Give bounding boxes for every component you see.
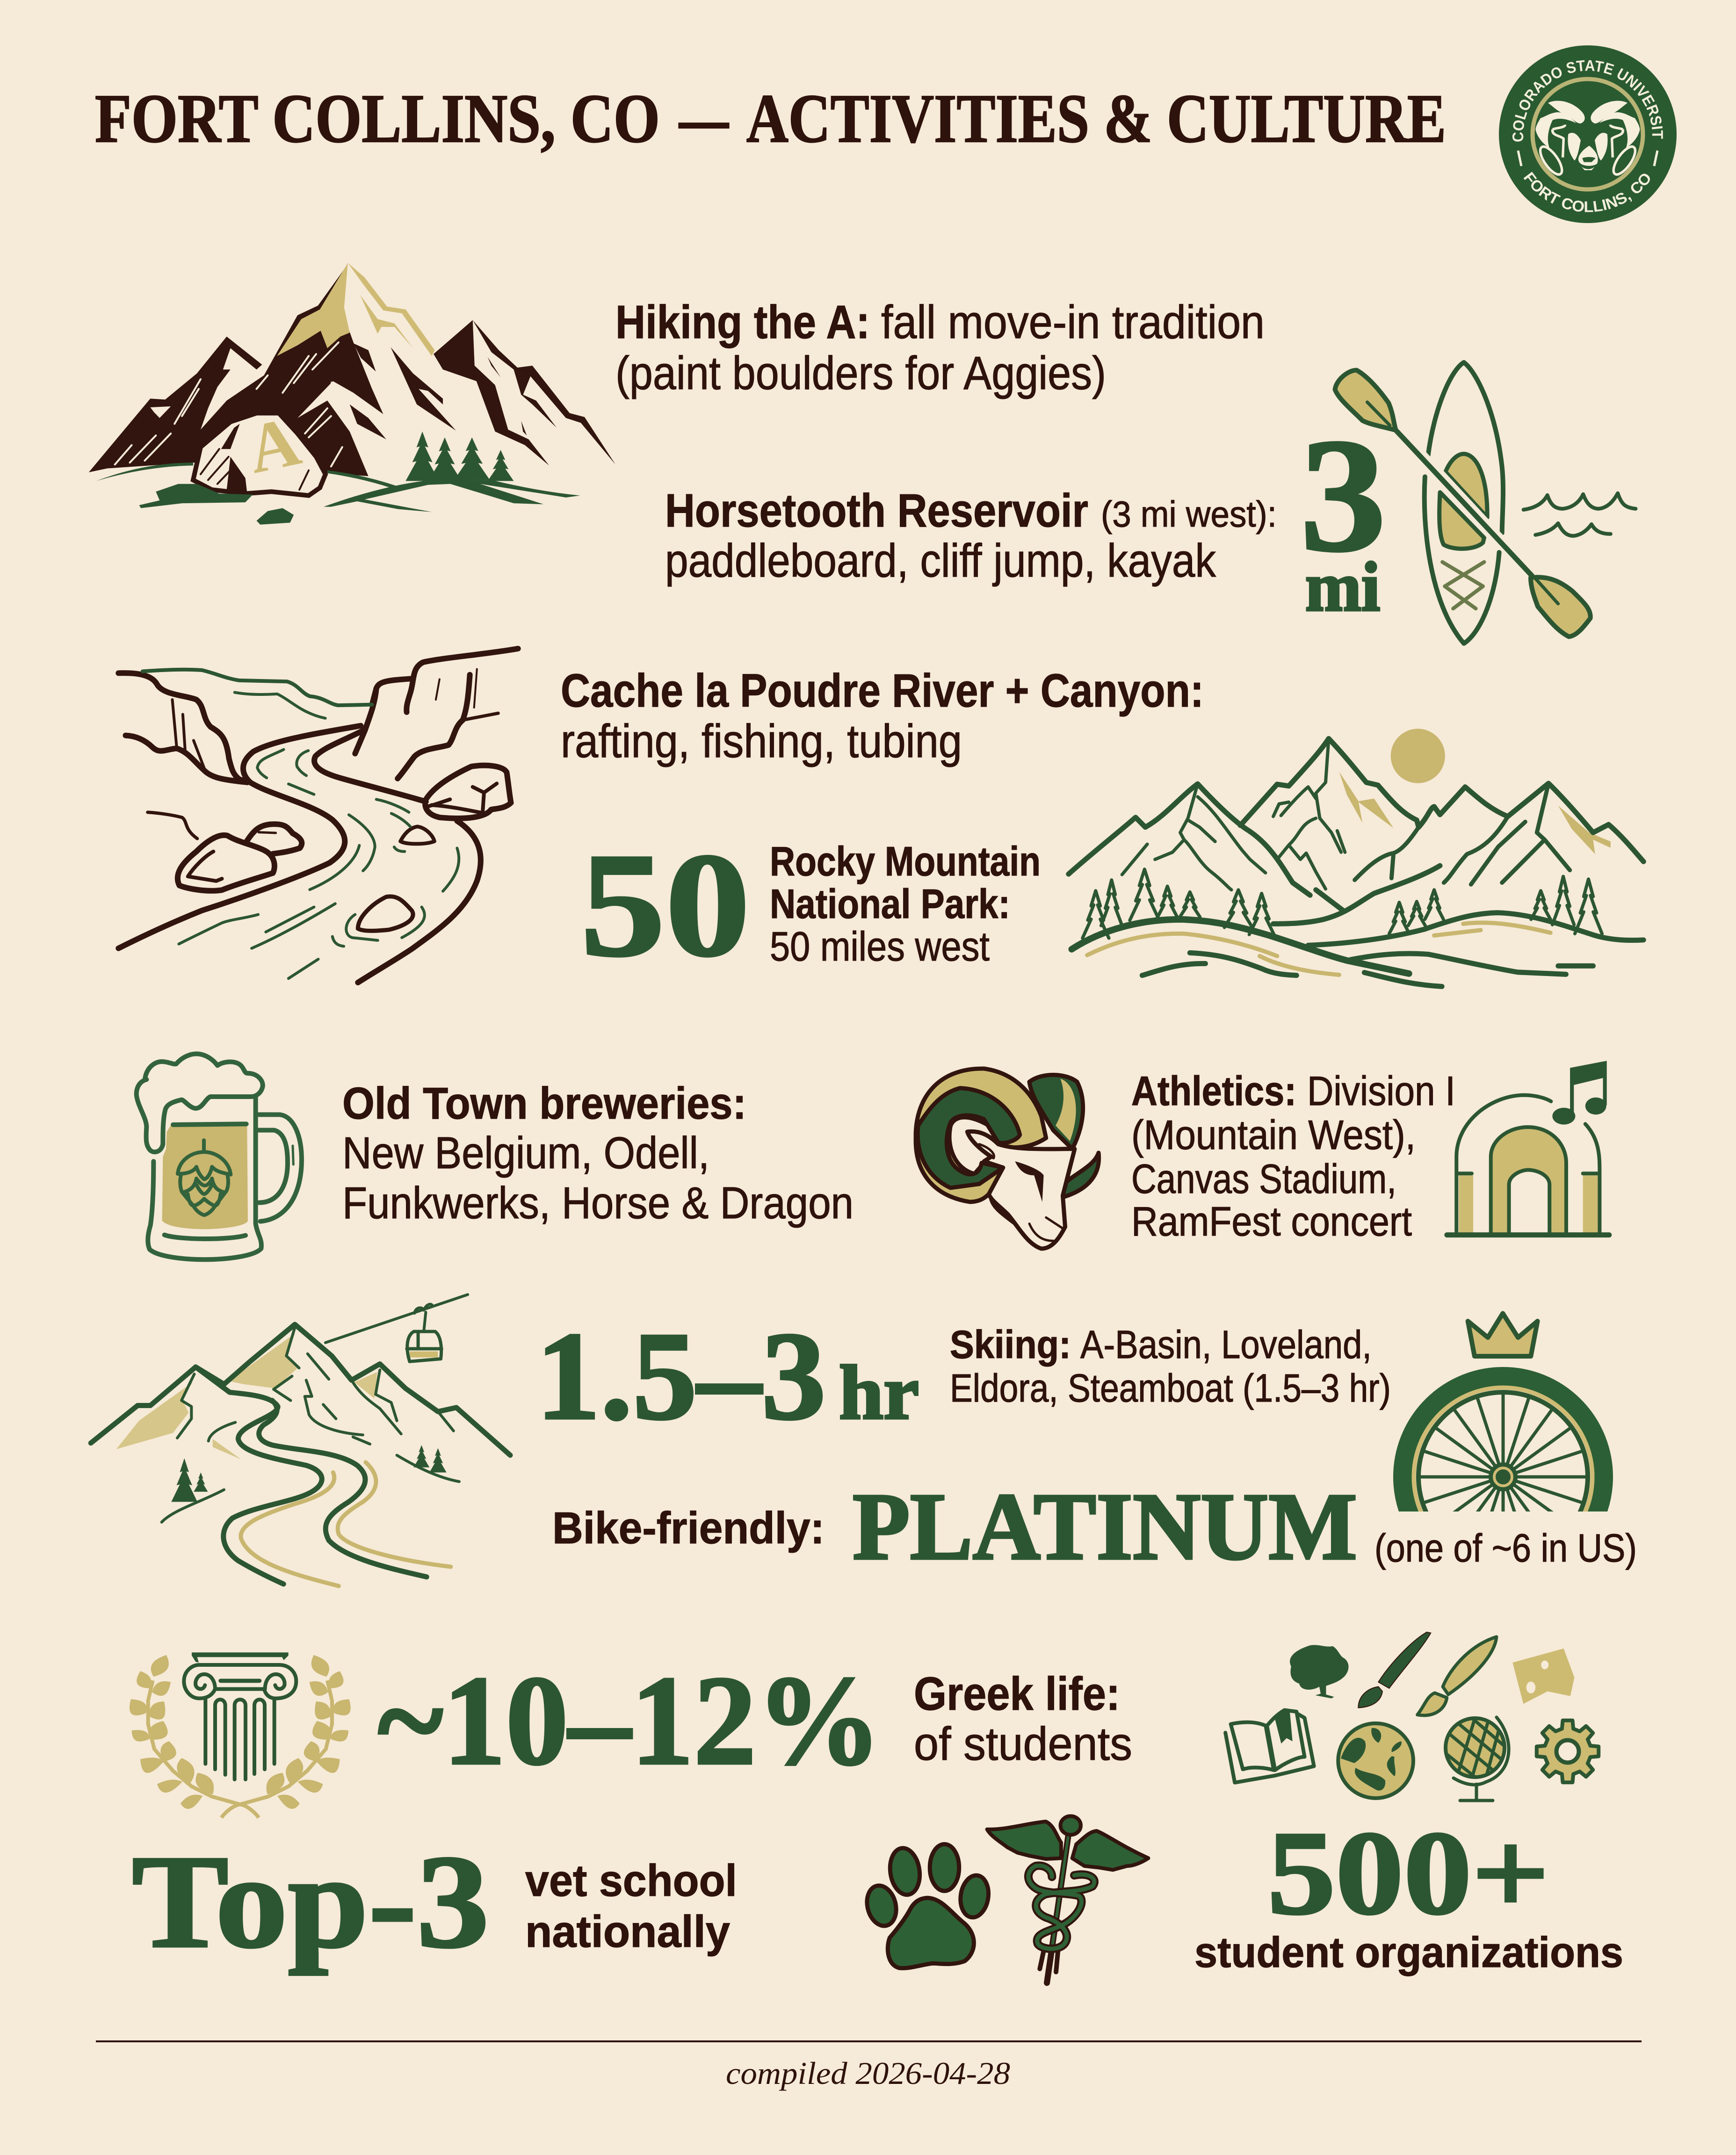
icon: Ionic column with laurel wreath	[130, 1652, 351, 1818]
text: Athletics	[1131, 1068, 1455, 1244]
icon: beer mug with hop	[137, 1054, 302, 1259]
icon: paintbrush dark	[1358, 1632, 1431, 1708]
text: Skiing: Skiing:	[950, 1323, 1071, 1367]
icon: paintbrush gold	[1418, 1637, 1497, 1715]
text: Skiing	[950, 1323, 1391, 1410]
boulder with letter A	[193, 413, 326, 496]
text: vet school nationally	[525, 1856, 737, 1957]
stat: Top-3: Top-3	[132, 1828, 489, 1975]
text: Hiking the A: fall move-in tradition	[881, 296, 1265, 348]
stat: 1.5–3 hr: hr	[839, 1350, 919, 1435]
title: ACTIVITIES & CULTURE	[746, 80, 1446, 157]
icon: hop cone	[178, 1140, 231, 1215]
text: Rocky Mountain National Park: 50 miles west	[770, 923, 990, 969]
text: Old Town breweries: Funkwerks, Horse & Dragon	[342, 1178, 854, 1228]
text: Old Town breweries: Old Town breweries:	[342, 1078, 746, 1128]
text: Athletics: (Mountain West),	[1131, 1112, 1416, 1158]
icon: tree	[1290, 1645, 1349, 1699]
stat: 3 mi: mi	[1305, 548, 1380, 626]
stat: 1.5–3 hr: 1.5–3	[536, 1306, 826, 1446]
text: Athletics: Division I	[1307, 1068, 1455, 1114]
text: Old Town breweries: New Belgium, Odell,	[342, 1128, 709, 1178]
icon: gondola lift	[326, 1294, 468, 1361]
text: Horsetooth Reservoir	[665, 485, 1277, 587]
icons: student organization activities	[1225, 1632, 1599, 1801]
stat: 50: 50	[580, 823, 750, 987]
text: Horsetooth Reservoir: (3 mi west):	[1101, 493, 1277, 535]
title: —	[679, 80, 729, 157]
text: Athletics: Canvas Stadium,	[1131, 1156, 1396, 1202]
text: Greek life: Greek life:	[914, 1668, 1120, 1720]
icon: open book	[1225, 1710, 1314, 1783]
text: Rocky Mountain National Park: National Park:	[770, 881, 1010, 927]
text: Cache la Poudre River: Cache la Poudre River + Canyon:	[561, 665, 1204, 717]
icon: earth	[1338, 1723, 1413, 1798]
stat: 500+ student organizations: 500+	[1267, 1807, 1549, 1939]
text: Athletics: Athletics:	[1131, 1068, 1296, 1114]
text: Rocky Mountain National Park	[770, 838, 1041, 969]
title	[95, 80, 1446, 157]
title: FORT COLLINS, CO	[95, 80, 660, 157]
text: Greek life	[914, 1668, 1132, 1770]
text: one of ~6 in US: (one of ~6 in US)	[1374, 1526, 1637, 1570]
text: Horsetooth Reservoir: Horsetooth Reservoir	[665, 485, 1088, 537]
text: Cache la Poudre River: rafting, fishing, tubing	[561, 715, 962, 767]
text: vet school nationally: nationally	[525, 1907, 730, 1957]
stat: 500+ student organizations	[1194, 1807, 1623, 1976]
text: Skiing: A-Basin, Loveland,	[1080, 1323, 1372, 1367]
icon: kayak and paddle	[1335, 362, 1635, 644]
text: Skiing: Eldora, Steamboat (1.5–3 hr)	[950, 1366, 1391, 1410]
stat: ~10–12%: ~10–12%	[378, 1650, 882, 1792]
stat: 3 mi: 3	[1300, 405, 1386, 586]
letter A on boulder: A	[241, 402, 307, 488]
text: Bike-friendly: Bike-friendly:	[552, 1503, 825, 1553]
illustration: mountain with painted A boulder	[89, 263, 615, 525]
icon: caduceus	[987, 1816, 1148, 1983]
text: vet school nationally: vet school	[525, 1856, 737, 1906]
text: Athletics: RamFest concert	[1131, 1198, 1412, 1244]
illustration: ski mountain with gondola	[91, 1294, 510, 1586]
icon: desk globe	[1444, 1715, 1511, 1802]
icon: stadium with music note	[1447, 1061, 1609, 1235]
footer date: compiled 2026-04-28	[726, 2055, 1010, 2091]
icon: bicycle wheel	[1393, 1367, 1613, 1511]
text: Greek life: of students	[914, 1718, 1132, 1770]
stat: PLATINUM: PLATINUM	[853, 1474, 1357, 1580]
text: Hiking the A	[615, 296, 1265, 399]
illustration: Rocky Mountains with sun	[1069, 729, 1643, 986]
text: Hiking the A: Hiking the A:	[615, 296, 870, 348]
icon: paw print	[864, 1844, 991, 1968]
icon: water waves	[1524, 493, 1635, 536]
text: Horsetooth Reservoir: paddleboard, cliff jump, kayak	[665, 535, 1216, 587]
stat: 500+ student organizations: student organizations	[1194, 1929, 1623, 1976]
icon: crown	[1468, 1313, 1538, 1356]
illustration: river canyon	[118, 649, 518, 983]
text: Rocky Mountain National Park: Rocky Mountain	[770, 838, 1041, 884]
icon: ram head	[916, 1069, 1099, 1249]
icon: palette	[1512, 1649, 1574, 1704]
text: Cache la Poudre River	[561, 665, 1204, 767]
badge: Colorado State University seal	[0, 0, 1677, 223]
badge: Colorado State University seal: FORT COLLINS, CO	[1520, 169, 1655, 216]
text: Old Town breweries	[342, 1078, 854, 1228]
text: Hiking the A: (paint boulders for Aggies)	[615, 347, 1106, 399]
icon: gear	[1537, 1721, 1599, 1782]
